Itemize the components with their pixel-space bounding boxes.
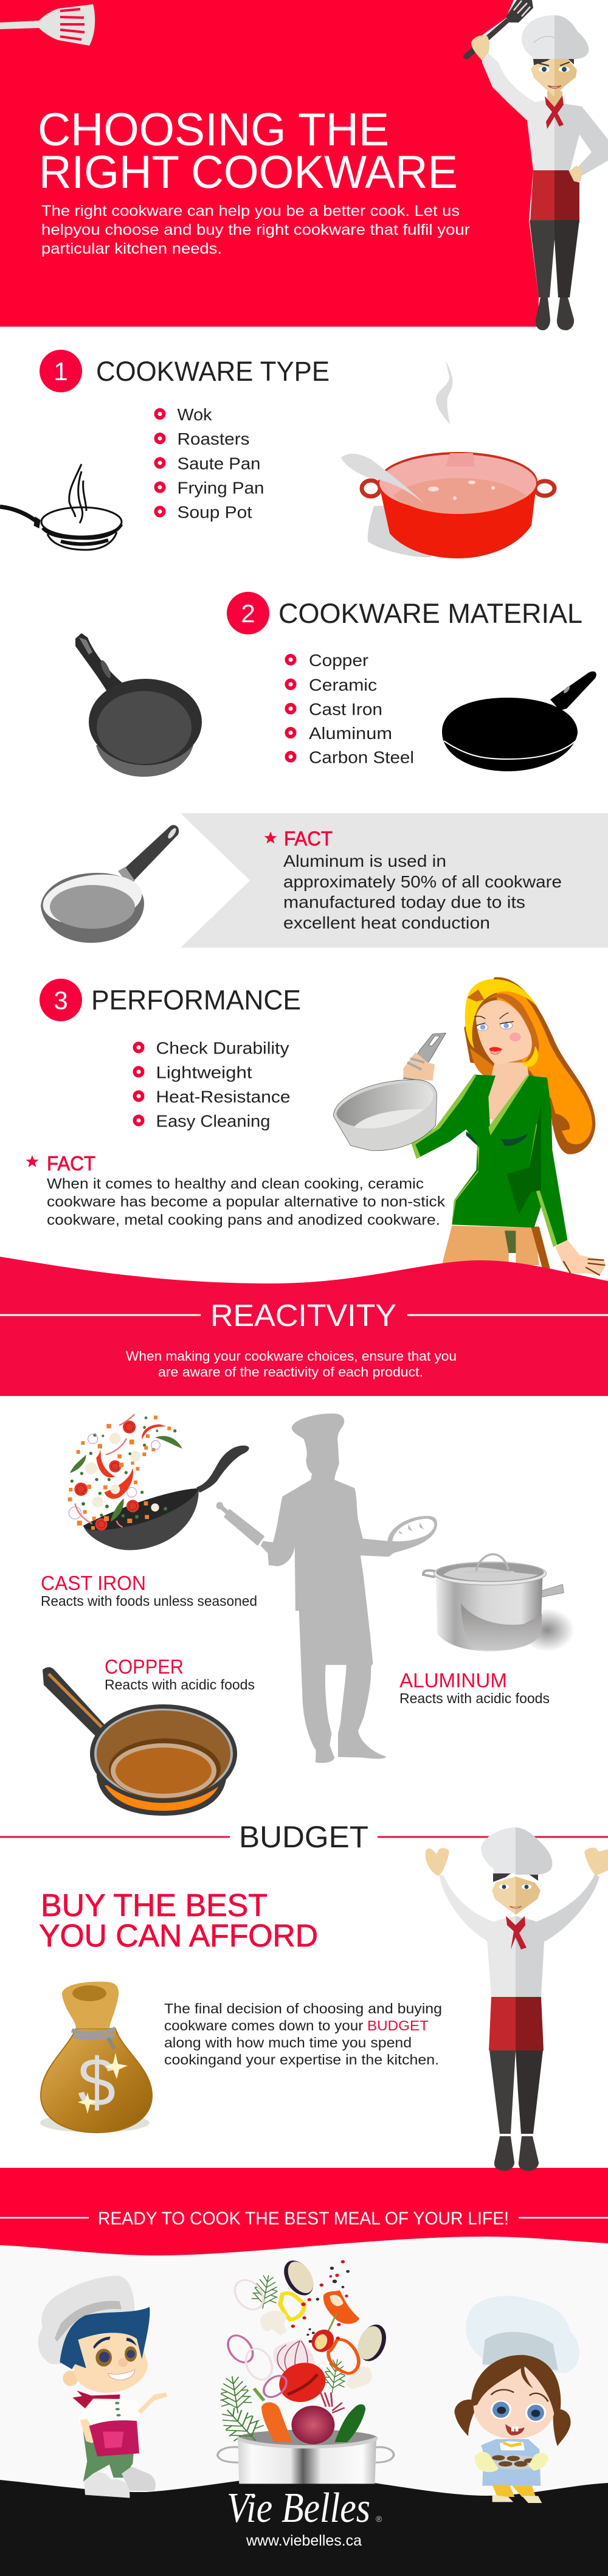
yellow pepper ring	[280, 2293, 304, 2319]
face	[492, 1876, 541, 1915]
brand logo: ®	[376, 2514, 382, 2524]
heading: buy the best: YOU CAN AFFORD	[39, 1918, 318, 1954]
list: cookware types: Roasters	[178, 429, 249, 448]
pot front	[238, 2438, 376, 2484]
callout: ceramic fact: cookware has become a popular alternative to non-stick	[47, 1193, 446, 1210]
orange pepper ring	[328, 2339, 359, 2373]
girl hat	[466, 2296, 579, 2373]
woman legs	[442, 1226, 539, 1265]
wok interior	[83, 1488, 199, 1530]
list: performance: Easy Cleaning	[156, 1112, 270, 1130]
icon: black wok silhouette	[442, 672, 596, 771]
intro text: helpyou choose and buy the right cookware that fulfil your	[41, 221, 470, 238]
icon: spatula	[0, 4, 95, 46]
icon: grey frying pan	[40, 825, 179, 943]
header red panel	[0, 0, 539, 327]
title: RIGHT COOKWARE	[39, 147, 458, 198]
budget paragraph: along with how much time you spend	[164, 2035, 412, 2050]
label: aluminum: ALUMINUM	[399, 1669, 507, 1692]
pot with falling vegetables	[213, 2257, 394, 2484]
callout: ceramic fact: When it comes to healthy and clean cooking, ceramic	[47, 1176, 424, 1192]
woman hand	[555, 1240, 606, 1276]
girl face	[474, 2368, 556, 2439]
girl mouth	[505, 2424, 525, 2435]
list: cookware types: Saute Pan	[178, 454, 260, 473]
section 2 heading: 2	[241, 599, 255, 628]
callout: ceramic fact: FACT	[47, 1152, 95, 1175]
black footer wave	[0, 2476, 608, 2576]
chef shoes	[536, 297, 574, 330]
callout: ceramic fact	[26, 1152, 446, 1229]
callout: aluminum fact: excellent heat conduction	[283, 914, 490, 932]
girl hair	[471, 2355, 561, 2415]
character: boy chef	[38, 2276, 167, 2498]
right arm	[535, 1875, 599, 1942]
onion half	[273, 2338, 315, 2375]
wok body	[83, 1488, 199, 1550]
girl legs	[492, 2485, 536, 2497]
callout: aluminum fact: FACT	[284, 827, 333, 850]
chef hat	[522, 15, 589, 59]
list: cookware types: Soup Pot	[178, 502, 252, 522]
boy face	[63, 2330, 148, 2393]
woman long hair	[464, 977, 595, 1154]
budget paragraph: cookingand your expertise in the kitchen.	[164, 2052, 439, 2067]
chef holding a spatula	[463, 0, 608, 330]
title	[38, 104, 458, 198]
list: performance: Check Durability	[156, 1039, 289, 1057]
raised hands	[426, 1848, 608, 1876]
list: materials: Aluminum	[309, 724, 392, 743]
icon: steam above red pot	[436, 361, 452, 425]
brand logo: Vie Belles	[227, 2485, 370, 2532]
callout: aluminum fact	[264, 827, 562, 932]
chef face	[531, 55, 577, 96]
section 3 heading: 3	[54, 986, 68, 1015]
woman hair top	[465, 979, 538, 1048]
boy trousers	[83, 2431, 134, 2482]
oven mitts	[475, 2452, 548, 2472]
chef right sleeve	[554, 102, 608, 176]
section 1 heading: 1	[54, 357, 68, 386]
red pepper slice	[323, 2290, 359, 2324]
callout: aluminum fact: approximately 50% of all cookware	[283, 872, 562, 891]
section 1 heading	[40, 350, 330, 392]
icon: wok with flying ingredients	[68, 1414, 249, 1550]
chef arm	[482, 54, 554, 182]
heading: buy the best: BUY THE BEST	[41, 1888, 268, 1923]
woman neck and chest	[488, 1063, 529, 1136]
onion ring front	[259, 2372, 291, 2400]
label: cast iron	[41, 1572, 257, 1609]
woman dress	[412, 1075, 567, 1247]
budget paragraph: cookware comes down to your BUDGET	[164, 2018, 429, 2033]
list: materials	[287, 651, 414, 766]
cucumber	[334, 2404, 365, 2442]
wok handle	[196, 1446, 249, 1493]
icon: line-art frying pan with steam	[0, 464, 122, 550]
chef with raised arms	[426, 1827, 608, 2171]
chef hand on hip	[569, 165, 582, 182]
label: copper: Reacts with acidic foods	[105, 1676, 255, 1692]
label: aluminum: Reacts with acidic foods	[399, 1690, 550, 1706]
list: performance: Heat-Resistance	[156, 1088, 291, 1106]
icon: money bag: $	[78, 2044, 116, 2120]
website url: www.viebelles.ca	[246, 2532, 362, 2549]
chef hand	[471, 35, 489, 61]
hat	[481, 1827, 552, 1875]
callout: aluminum fact: Aluminum is used in	[283, 852, 446, 870]
heading: budget: BUDGET	[239, 1820, 368, 1854]
label: cast iron: CAST IRON	[41, 1572, 146, 1594]
hair	[493, 1870, 538, 1882]
tomato	[270, 2355, 335, 2409]
label: copper	[105, 1656, 255, 1692]
budget paragraph: The final decision of choosing and buying	[164, 2001, 442, 2016]
chef torso	[527, 100, 554, 170]
beet	[291, 2390, 345, 2444]
list: materials: Copper	[309, 651, 368, 670]
plate with cookies	[490, 2455, 542, 2470]
label: aluminum	[399, 1669, 550, 1706]
flying ingredients	[68, 1414, 182, 1530]
callout: aluminum fact: manufactured today due to its	[283, 893, 525, 912]
torso	[486, 1916, 545, 1997]
heading: buy the best	[39, 1888, 318, 1954]
chef spatula	[463, 0, 533, 59]
icon: stainless steel pot	[423, 1554, 575, 1651]
fact band	[181, 813, 608, 948]
character: girl chef	[455, 2296, 579, 2503]
list: cookware types: Wok	[178, 405, 213, 424]
pot handles	[218, 2447, 394, 2462]
chef hair	[533, 54, 574, 65]
heading: reactivity: REACITVITY	[210, 1298, 396, 1333]
section 3 heading	[40, 979, 301, 1021]
boy shoes	[84, 2467, 156, 2498]
pot rim	[237, 2436, 378, 2448]
section 3 heading: PERFORMANCE	[91, 984, 301, 1016]
woman holding a saucepan	[333, 977, 606, 1276]
peppercorns	[291, 2260, 348, 2340]
intro text	[41, 203, 470, 257]
trousers	[489, 2050, 543, 2134]
shirt buttons	[115, 2402, 121, 2417]
girl dress	[481, 2439, 541, 2486]
intro text: particular kitchen needs.	[41, 240, 222, 257]
chef apron	[530, 170, 579, 223]
boy apron	[89, 2420, 139, 2456]
shoes	[494, 2136, 539, 2171]
intro text: The right cookware can help you be a better cook. Let us	[41, 203, 460, 220]
icon: money bag	[40, 1982, 152, 2133]
boy arm	[80, 2392, 167, 2443]
scarf	[506, 1916, 527, 1949]
budget paragraph	[164, 2001, 442, 2067]
left arm	[439, 1875, 496, 1953]
list: materials: Cast Iron	[309, 700, 382, 719]
icon: copper saucepan	[43, 1667, 237, 1816]
reactivity intro text	[126, 1349, 457, 1380]
chef scarf	[545, 95, 564, 129]
callout: ceramic fact: cookware, metal cooking pans and anodized cookware.	[47, 1212, 440, 1229]
list: materials: Carbon Steel	[309, 748, 414, 766]
title: CHOOSING THE	[38, 104, 389, 156]
boy hair	[60, 2307, 150, 2369]
icon: red pot with soup	[341, 452, 554, 558]
section 2 heading: COOKWARE MATERIAL	[278, 598, 582, 629]
chef neck	[547, 91, 562, 108]
woman's saucepan	[333, 1033, 446, 1151]
eggplant slices	[278, 2257, 390, 2364]
onion rings	[223, 2276, 276, 2382]
red band: call to action	[0, 2168, 608, 2255]
list: cookware types: Frying Pan	[178, 478, 264, 498]
list: cookware types	[156, 405, 264, 522]
call to action heading: READY TO COOK THE BEST MEAL OF YOUR LIFE!	[98, 2209, 509, 2229]
apron	[489, 1997, 544, 2050]
boy shirt	[78, 2395, 141, 2426]
mushrooms	[260, 2311, 372, 2389]
pigtails	[455, 2400, 571, 2446]
apron pocket	[103, 2432, 123, 2448]
chef trousers	[530, 220, 579, 297]
list: performance: Lightweight	[156, 1063, 252, 1081]
girl eyes	[491, 2390, 548, 2422]
small chili	[309, 2313, 337, 2354]
woman eyes and mouth	[474, 1013, 521, 1054]
label: copper: COPPER	[105, 1656, 184, 1678]
dill sprigs	[213, 2273, 348, 2448]
pot back rim	[237, 2429, 378, 2446]
reactivity red band	[0, 1257, 608, 1396]
carrot	[254, 2389, 292, 2442]
chef silhouette	[216, 1414, 437, 1763]
label: cast iron: Reacts with foods unless seasoned	[41, 1593, 257, 1609]
boy hat	[38, 2276, 135, 2364]
section 2 heading	[227, 592, 582, 634]
boy scarf	[72, 2390, 120, 2408]
list: materials: Ceramic	[309, 675, 377, 695]
reactivity intro text: are aware of the reactivity of each product.	[158, 1364, 423, 1380]
footer light background	[0, 2232, 608, 2500]
girl shoes	[492, 2495, 542, 2503]
woman face	[476, 1000, 533, 1066]
list: performance	[135, 1039, 291, 1130]
icon: dark frying pan	[75, 633, 202, 777]
reactivity intro text: When making your cookware choices, ensure that you	[126, 1349, 457, 1364]
section 1 heading: COOKWARE TYPE	[96, 356, 330, 387]
